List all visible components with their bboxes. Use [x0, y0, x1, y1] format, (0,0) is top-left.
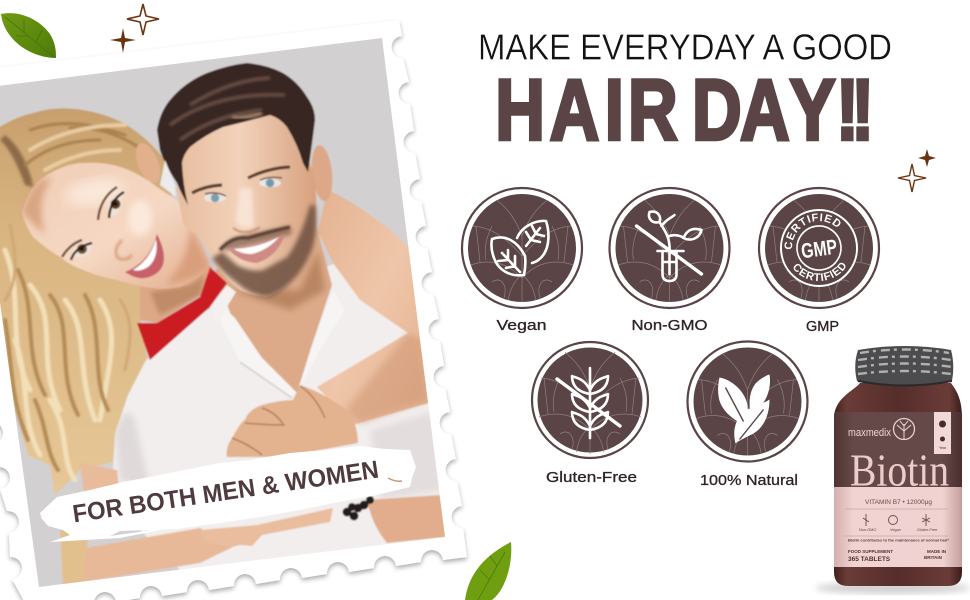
icon: filled star right — [918, 149, 936, 167]
icon: vegan leaves — [462, 188, 582, 308]
heading — [478, 26, 892, 158]
label icons — [863, 514, 930, 526]
heading line 2: HAIR DAY!! — [495, 62, 874, 158]
man face — [177, 115, 316, 297]
icon: solid leaves — [688, 342, 808, 462]
side tag — [934, 412, 951, 454]
product title: Biotin — [850, 444, 949, 496]
badge: Gluten-Free — [532, 342, 648, 486]
label: Non-GMO — [632, 317, 708, 334]
label captions: Biotin contributes to the maintenance of normal hair* — [848, 538, 950, 542]
badge: Vegan — [462, 188, 582, 334]
supplement info: FOOD SUPPLEMENT — [848, 549, 893, 554]
icon: outline star right — [898, 164, 926, 192]
badge: 100% Natural — [688, 342, 808, 489]
woman eyes, brows and smile — [62, 187, 164, 278]
man mouth — [228, 234, 285, 263]
bottle body — [834, 383, 962, 586]
label: Gluten-Free — [546, 469, 637, 486]
bottle shadow — [815, 582, 970, 594]
icon: green leaf bottom — [465, 542, 511, 600]
supplement info: MADE IN — [927, 549, 946, 554]
white highlight between heads — [160, 160, 176, 197]
icon: GMP certified seal: CERTIFIED — [784, 213, 840, 250]
dosage: VITAMIN B7 • 12000µg — [865, 499, 932, 506]
label captions: Gluten-Free — [917, 528, 937, 532]
icon: GMP certified seal — [758, 186, 880, 310]
hands — [227, 385, 358, 457]
label: GMP — [806, 318, 839, 335]
side tag: Year — [939, 446, 947, 450]
product bottle — [815, 346, 970, 594]
label: 100% Natural — [700, 472, 798, 489]
brand name: maxmedix — [848, 427, 891, 439]
man forearm and lower hands — [367, 495, 447, 543]
man beard — [212, 205, 316, 297]
supplement info: BRITAIN — [924, 555, 942, 560]
icon: GMP certified seal: GMP — [800, 236, 839, 263]
stamp border — [0, 20, 467, 600]
shirt — [113, 260, 460, 580]
label captions — [848, 528, 950, 542]
pink label — [834, 487, 962, 567]
bracelet — [342, 496, 374, 520]
banner text: FOR BOTH MEN & WOMEN — [71, 456, 381, 528]
woman lower arm — [80, 464, 120, 492]
heading line 1: MAKE EVERYDAY A GOOD — [478, 26, 892, 68]
icon: green leaf top left — [1, 13, 56, 58]
tree logo — [894, 418, 914, 440]
label captions: Vegan — [890, 528, 901, 532]
man eyes, brows and nose — [192, 167, 290, 232]
label: Vegan — [496, 317, 546, 334]
dark brown label — [834, 412, 962, 487]
man hair — [157, 63, 315, 205]
icon: crossed test tube and sprig — [610, 188, 730, 308]
red top — [137, 267, 227, 360]
man neck — [215, 225, 332, 393]
woman neck — [140, 262, 212, 323]
photo: couple — [0, 38, 445, 587]
icon: GMP certified seal: CERTIFIED — [794, 262, 846, 281]
woman ear — [136, 143, 160, 183]
woman face — [22, 163, 210, 289]
man ear — [310, 144, 333, 202]
icon: filled star — [110, 28, 136, 53]
collar — [230, 314, 296, 392]
panel: photo stamp frame — [0, 20, 470, 600]
icon: outline star — [127, 4, 159, 35]
woman arm over shoulder — [317, 190, 429, 425]
label captions: Non-GMO — [859, 528, 876, 532]
badge: Non-GMO — [610, 188, 730, 334]
supplement info — [848, 549, 946, 563]
supplement info: 365 TABLETS — [848, 556, 891, 563]
icon: crossed wheat — [532, 342, 648, 458]
cap — [855, 346, 953, 386]
brush banner — [40, 446, 416, 542]
woman long hair — [0, 108, 172, 495]
badge: GMP — [758, 186, 880, 335]
